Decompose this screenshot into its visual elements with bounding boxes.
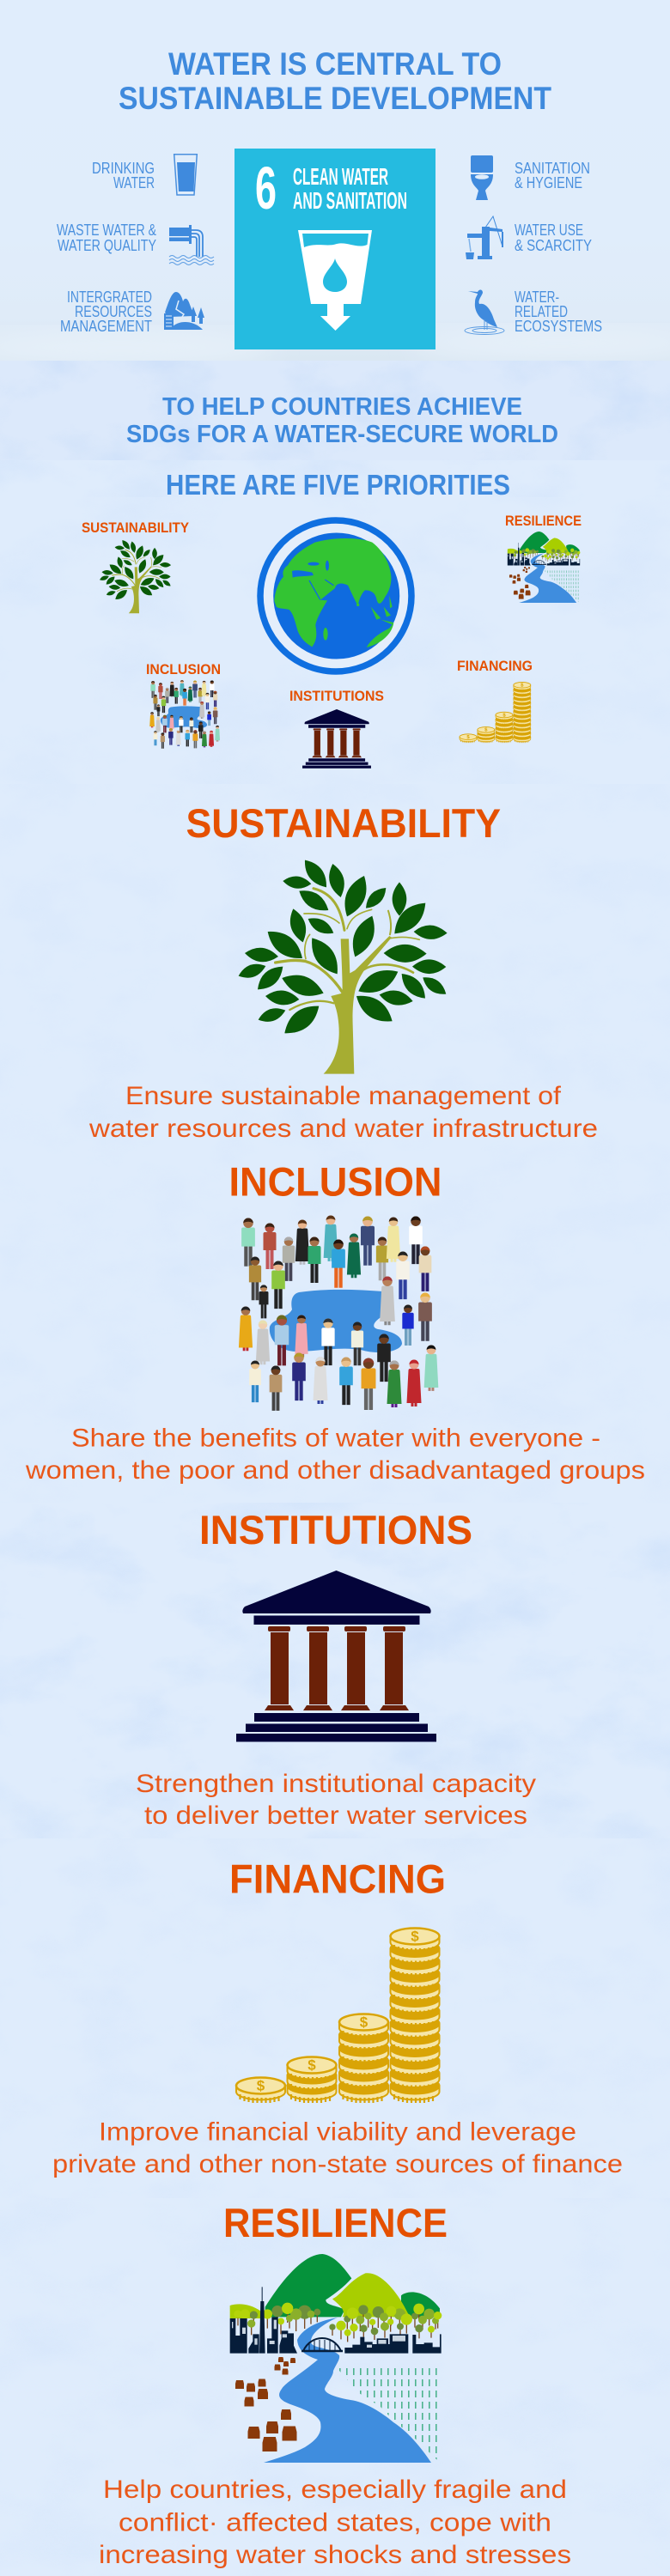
- subheading: five priorities: HERE ARE FIVE PRIORITIES: [166, 469, 510, 501]
- label: water use and scarcity: WATER USE: [515, 222, 583, 239]
- icon: crowd around water: [239, 1215, 438, 1411]
- overview item: inclusion: [146, 661, 221, 749]
- heading: SUSTAINABILITY: [186, 800, 501, 846]
- icon: landscape with river: [230, 2254, 442, 2463]
- icon: small institution building: [302, 709, 371, 769]
- section: sustainability: [88, 800, 598, 1143]
- label: integrated resources management: RESOURCES: [75, 303, 152, 320]
- description: [52, 2117, 623, 2178]
- label: drinking water: WATER: [113, 174, 155, 191]
- icon: heron: [465, 289, 504, 335]
- label: integrated resources management: MANAGEMENT: [60, 318, 152, 335]
- icon: mountains and resources: [164, 292, 204, 330]
- subheading: help countries achieve SDGs: [126, 393, 558, 448]
- subheading: help countries achieve SDGs: TO HELP COUNTRIES ACHIEVE: [162, 393, 522, 421]
- overview item: institutions: [289, 688, 384, 769]
- description: Help countries, especially fragile and: [103, 2476, 567, 2504]
- label: drinking water: DRINKING: [92, 160, 155, 177]
- icon: small crowd: [149, 680, 220, 749]
- overview item: resilience: RESILIENCE: [505, 513, 582, 529]
- icon: small tree: [100, 540, 171, 613]
- overview item: sustainability: SUSTAINABILITY: [82, 519, 190, 536]
- description: to deliver better water services: [144, 1801, 527, 1830]
- label: waste water and water quality: WATER QUALITY: [58, 237, 156, 254]
- SDG number: 6: [255, 155, 277, 222]
- icon: tree: [239, 860, 448, 1074]
- title: [119, 46, 551, 116]
- SDG name: [293, 163, 407, 214]
- description: Share the benefits of water with everyone -: [71, 1424, 600, 1453]
- icon: small landscape: [508, 532, 580, 603]
- icon: coin stacks: [236, 1929, 440, 2103]
- label: water use and scarcity: [515, 222, 592, 254]
- overview item: institutions: INSTITUTIONS: [289, 688, 384, 704]
- overview item: inclusion: INCLUSION: [146, 661, 221, 677]
- label: integrated resources management: INTERGRATED: [67, 289, 152, 306]
- description: [99, 2476, 571, 2569]
- label: drinking water: [92, 160, 155, 191]
- section: inclusion: [25, 1159, 645, 1485]
- label: water-related ecosystems: WATER-: [515, 289, 559, 306]
- description: conflict· affected states, cope with: [119, 2509, 551, 2537]
- label: sanitation and hygiene: & HYGIENE: [515, 174, 582, 191]
- icon: small coin stacks: [460, 682, 531, 743]
- description: Ensure sustainable management of: [125, 1082, 562, 1110]
- label: integrated resources management: [60, 289, 152, 335]
- label: water-related ecosystems: RELATED: [515, 303, 568, 320]
- description: water resources and water infrastructure: [88, 1115, 598, 1143]
- heading: FINANCING: [229, 1856, 446, 1901]
- label: water-related ecosystems: [515, 289, 602, 335]
- description: Improve financial viability and leverage: [99, 2117, 576, 2147]
- icon: institution building: [236, 1571, 436, 1741]
- heading: RESILIENCE: [223, 2200, 448, 2245]
- heading: INCLUSION: [228, 1159, 442, 1204]
- section: financing: [52, 1856, 623, 2178]
- description: [136, 1770, 536, 1830]
- description: [25, 1424, 645, 1485]
- label: water-related ecosystems: ECOSYSTEMS: [515, 318, 602, 335]
- label: sanitation and hygiene: [515, 160, 590, 191]
- icon: waste pipe: [169, 225, 214, 264]
- overview item: financing: [457, 658, 533, 743]
- description: private and other non-state sources of finance: [52, 2150, 623, 2178]
- icon: toilet: [471, 155, 493, 200]
- overview item: financing: FINANCING: [457, 658, 533, 674]
- title: WATER IS CENTRAL TO: [168, 46, 502, 82]
- globe: [260, 520, 411, 671]
- description: Strengthen institutional capacity: [136, 1770, 536, 1798]
- description: increasing water shocks and stresses: [99, 2541, 571, 2569]
- description: women, the poor and other disadvantaged groups: [25, 1456, 645, 1485]
- section: institutions: [136, 1507, 536, 1830]
- icon: glass with water drop: [298, 230, 372, 331]
- heading: INSTITUTIONS: [199, 1507, 472, 1552]
- label: water use and scarcity: & SCARCITY: [515, 237, 592, 254]
- SDG name: AND SANITATION: [293, 187, 407, 214]
- title: SUSTAINABLE DEVELOPMENT: [119, 81, 551, 116]
- overview item: sustainability: [82, 519, 190, 613]
- label: waste water and water quality: [57, 222, 156, 254]
- panel: SDG 6 clean water and sanitation: [234, 149, 436, 349]
- SDG name: CLEAN WATER: [293, 163, 388, 190]
- icon: hand pump and bucket: [466, 216, 503, 259]
- icon: drinking glass: [174, 155, 197, 195]
- label: waste water and water quality: WASTE WATER &: [57, 222, 156, 239]
- subheading: help countries achieve SDGs: SDGs FOR A WATER-SECURE WORLD: [126, 421, 558, 448]
- description: [88, 1082, 598, 1143]
- section: resilience: [99, 2200, 571, 2569]
- overview item: resilience: [505, 513, 582, 603]
- label: sanitation and hygiene: SANITATION: [515, 160, 590, 177]
